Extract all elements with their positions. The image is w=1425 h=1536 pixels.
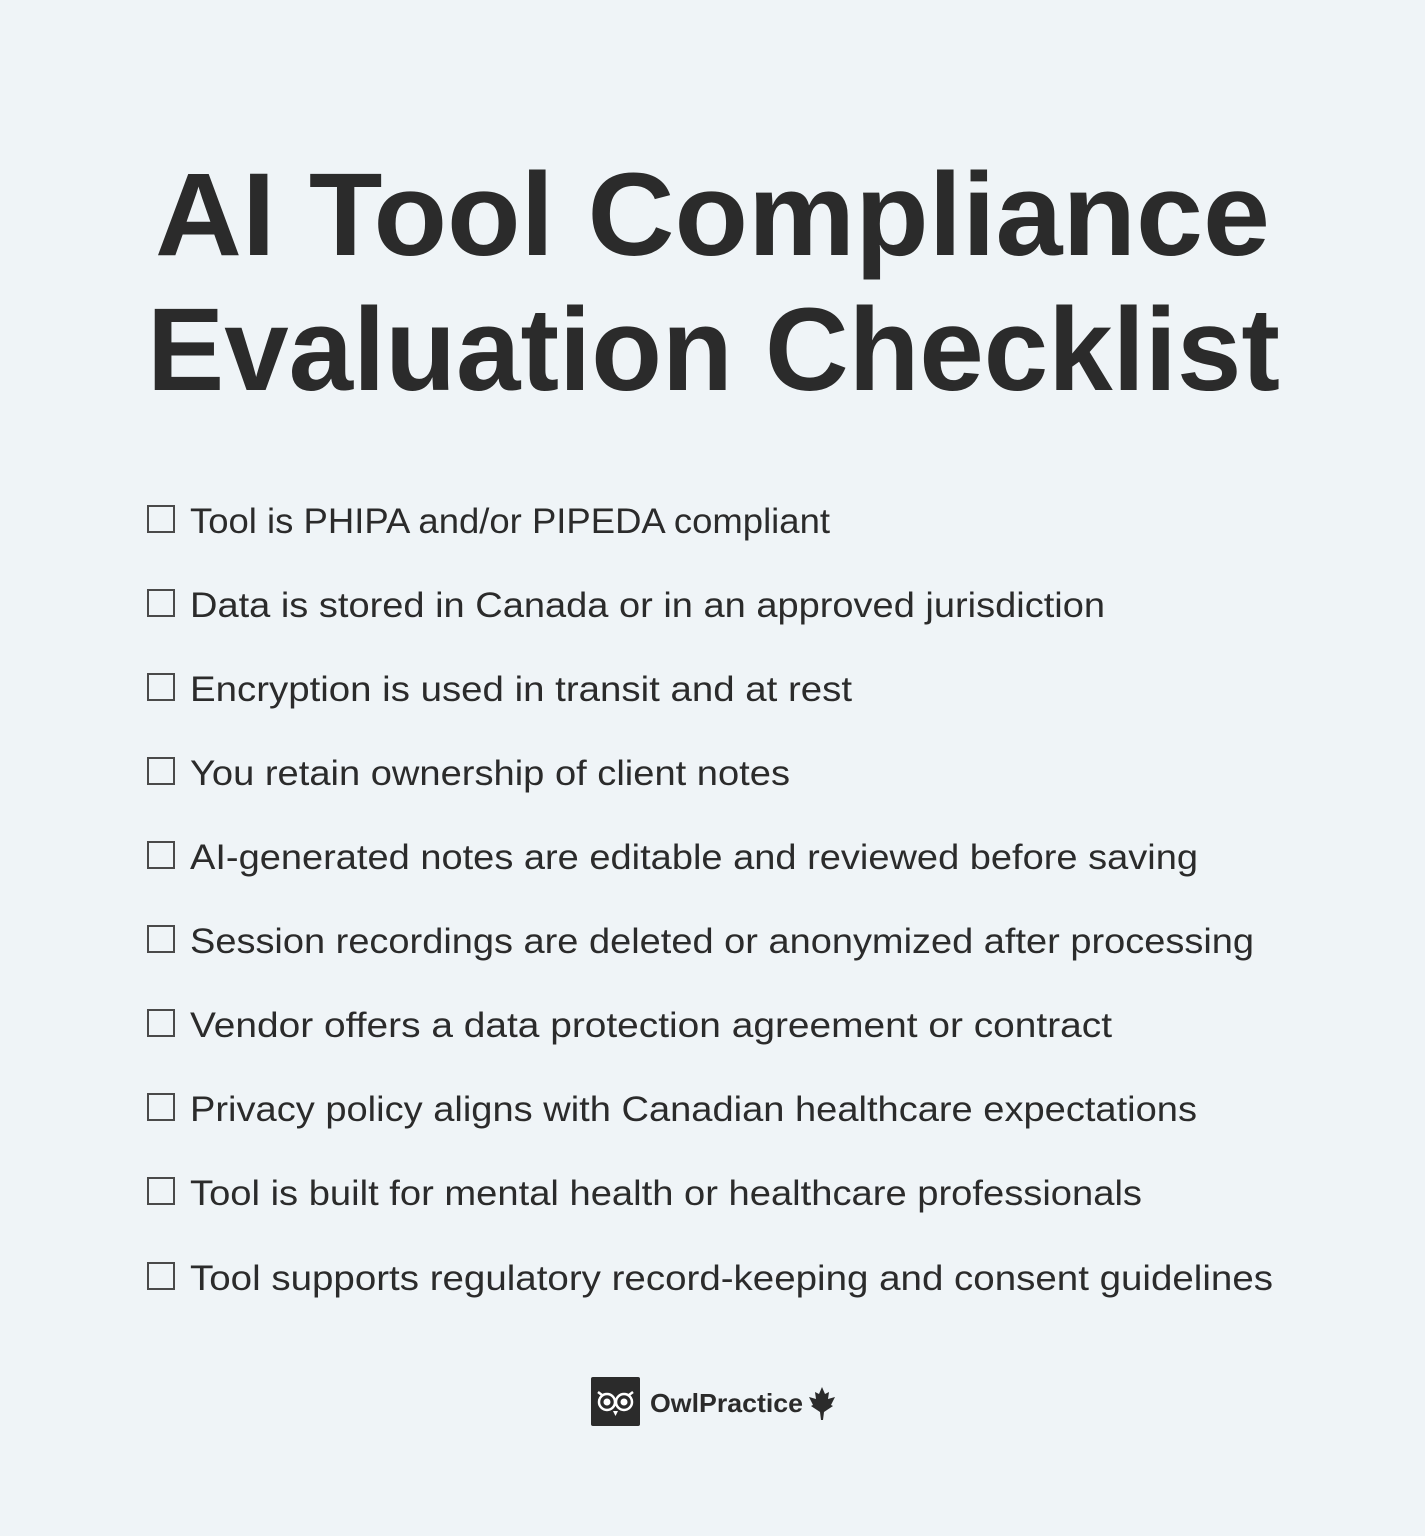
item 6: Session recordings are deleted or anonymized after processing [190,922,1254,961]
item 9: Tool is built for mental health or healthcare professionals [190,1174,1142,1213]
item 8: Privacy policy aligns with Canadian healthcare expectations [190,1090,1197,1129]
title: Evaluation Checklist [147,284,1280,416]
item 5: AI-generated notes are editable and reviewed before saving [190,838,1198,877]
item 1: Tool is PHIPA and/or PIPEDA compliant [190,502,830,541]
item 3: Encryption is used in transit and at rest [190,670,852,709]
item 10: Tool supports regulatory record-keeping and consent guidelines [190,1259,1273,1298]
item 7: Vendor offers a data protection agreement or contract [190,1006,1112,1045]
item 2: Data is stored in Canada or in an approved jurisdiction [190,586,1105,625]
icon: maple leaf [809,1387,835,1420]
title: AI Tool Compliance [155,149,1270,281]
title [147,149,1280,416]
checklist [148,502,1273,1298]
logo text: OwlPractice [650,1388,803,1418]
icon: owl [591,1377,640,1426]
logo [591,1377,835,1426]
item 4: You retain ownership of client notes [190,754,790,793]
